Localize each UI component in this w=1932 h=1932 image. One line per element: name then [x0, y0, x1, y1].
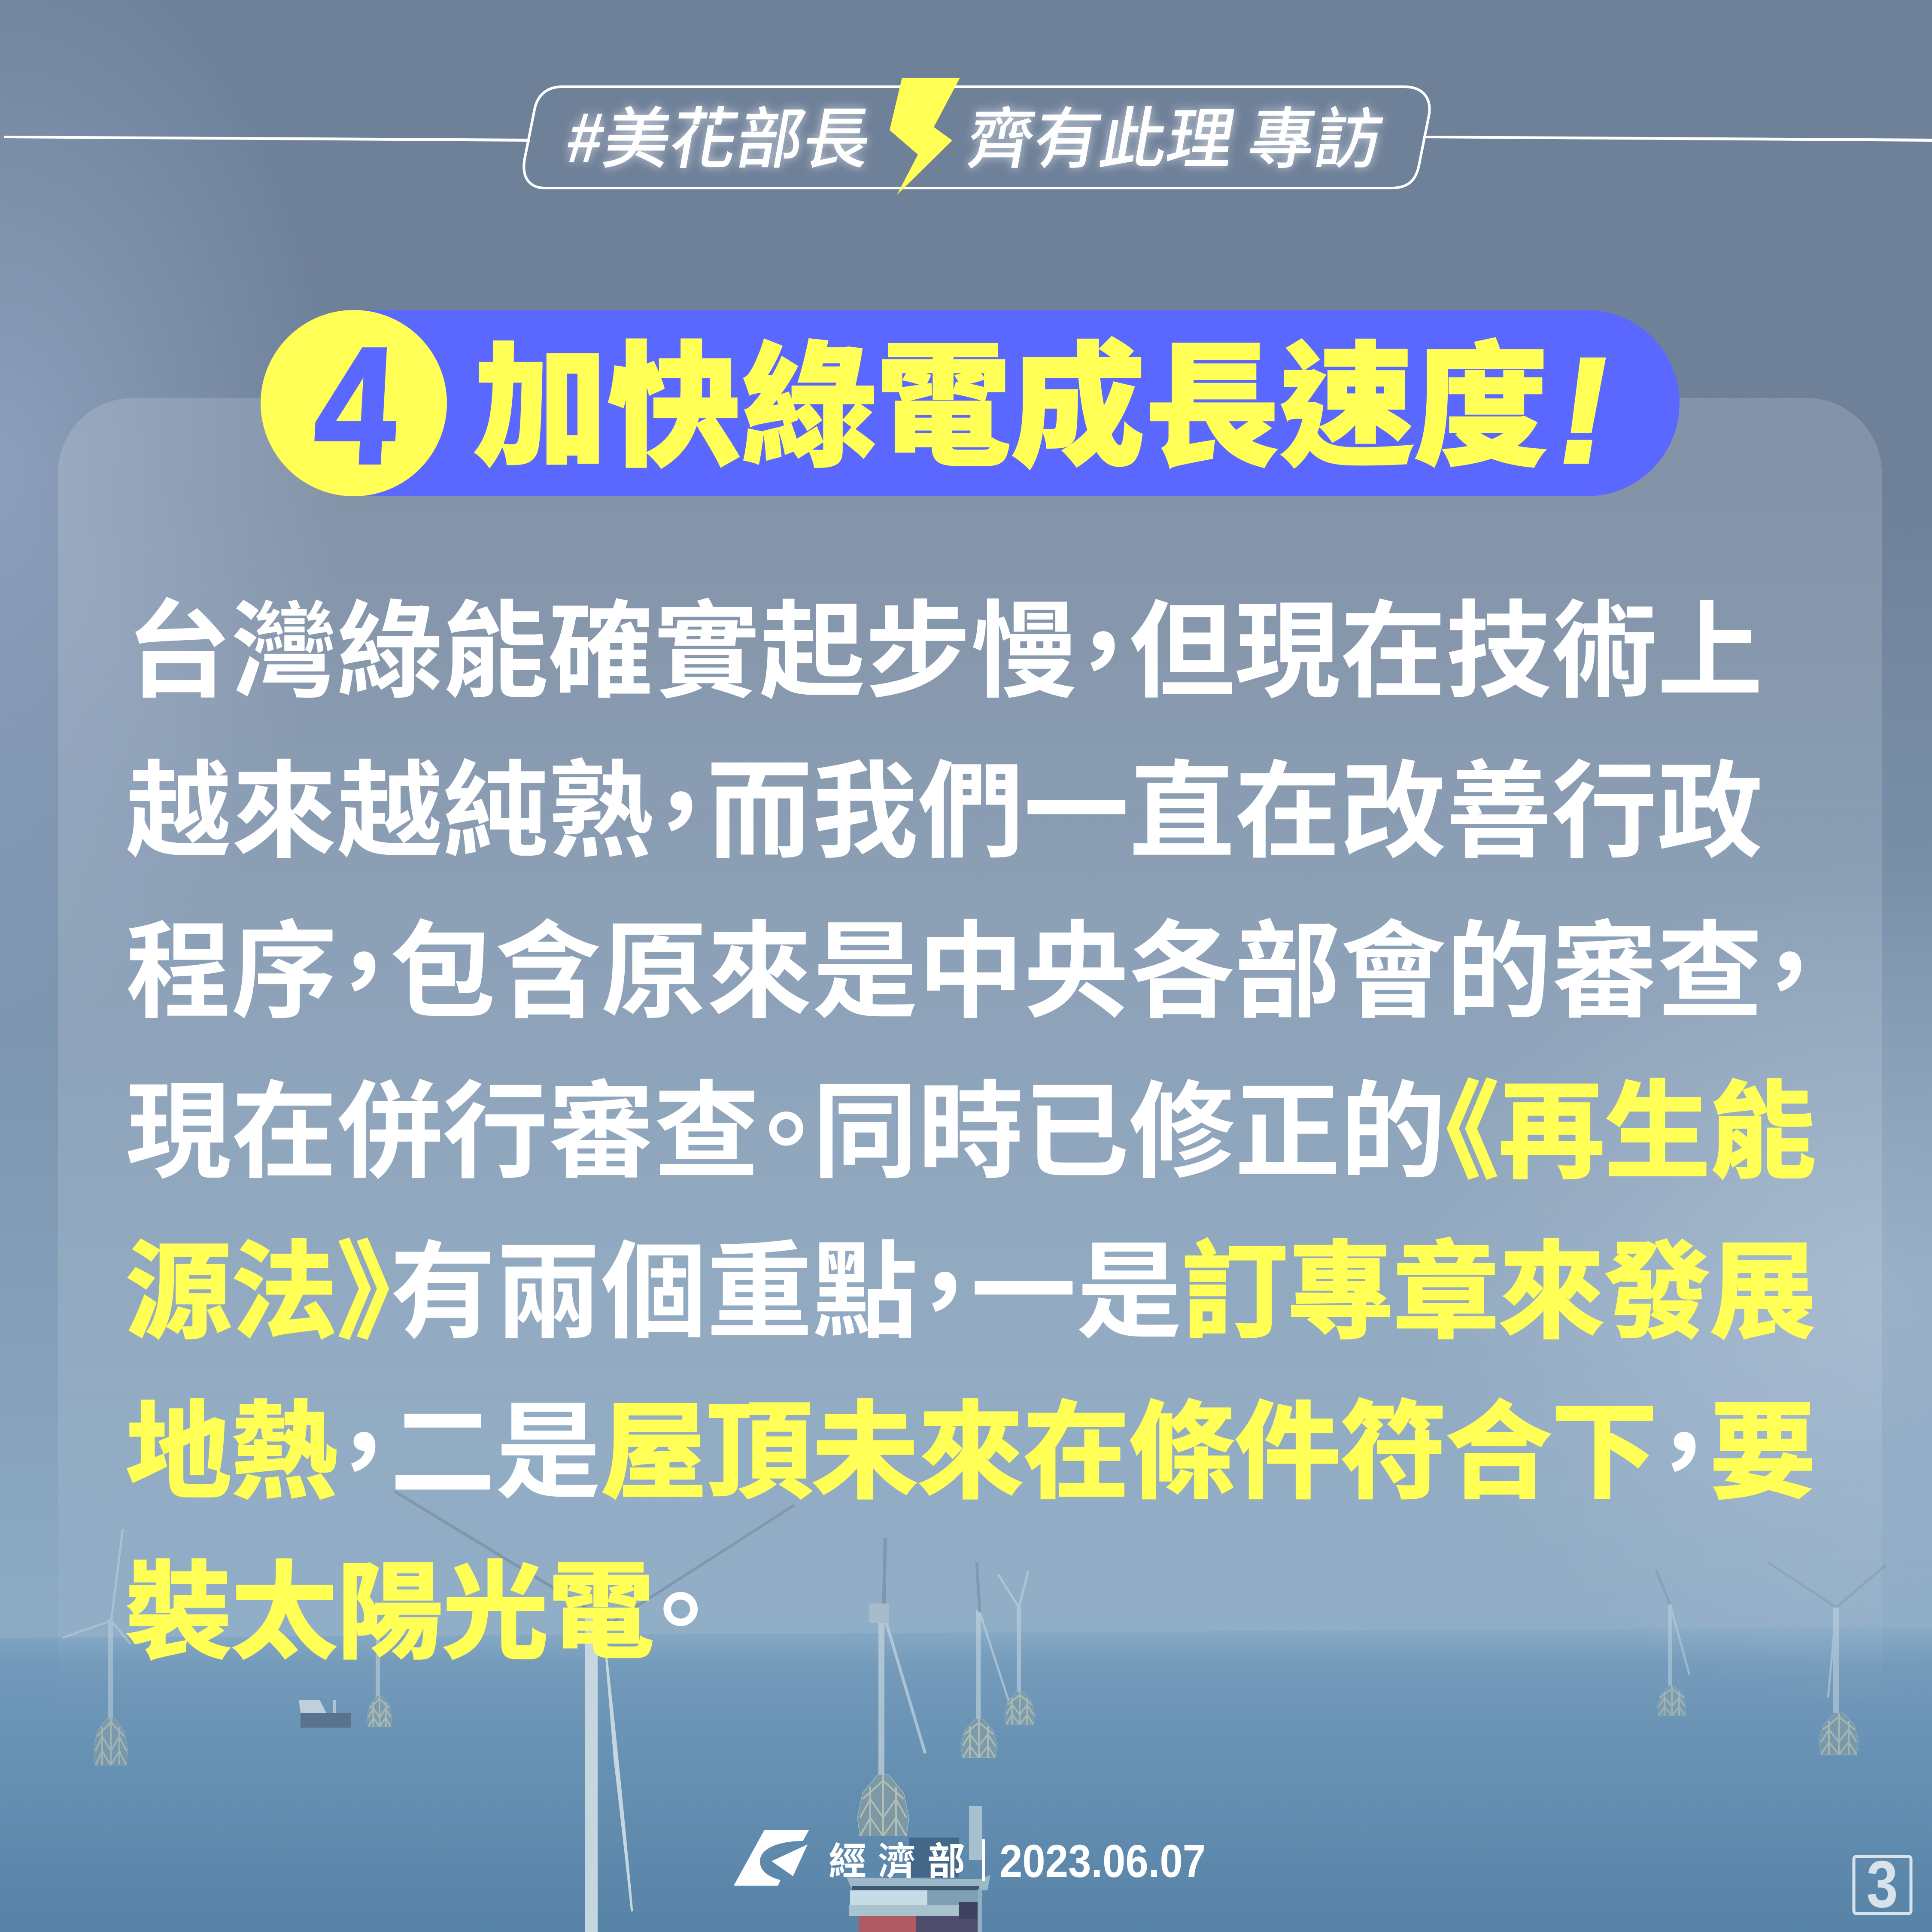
header divider left	[4, 136, 530, 142]
icon: lightning bolt	[890, 78, 960, 195]
title text: 加快綠電成長速度	[473, 299, 1548, 493]
title pill	[261, 310, 1680, 496]
title bar	[261, 299, 1680, 498]
number 4: 4	[311, 313, 402, 498]
page number box	[1854, 1847, 1911, 1921]
turbine E	[961, 1562, 1009, 1758]
turbine B	[367, 1631, 392, 1727]
footer: ministry logo	[734, 1830, 809, 1886]
background glow left	[0, 0, 343, 1030]
number circle	[261, 310, 447, 496]
page number: 3	[1866, 1847, 1898, 1921]
background: sea	[0, 1627, 1932, 1932]
turbine F	[998, 1571, 1035, 1725]
wind farm photo illustration	[62, 1491, 1886, 1932]
title exclamation: !	[1547, 328, 1622, 493]
hashtag: 專訪: 專訪	[1242, 85, 1392, 182]
body text	[126, 566, 1816, 1680]
small vessel	[299, 1700, 351, 1728]
hashtag: 美花部長: #美花部長	[559, 85, 880, 182]
body line 1: 台灣綠能確實起步慢，但現在技術上	[126, 566, 1763, 719]
footer: ministry name: 經濟部	[829, 1831, 977, 1886]
installation ship	[847, 1806, 990, 1932]
hashtag: 齊有此理: 齊有此理	[960, 85, 1244, 182]
background glow right	[1417, 859, 1932, 1717]
main turbine C	[394, 1491, 795, 1932]
footer separator	[982, 1839, 985, 1881]
body line 2: 越來越純熟，而我們一直在改善行政	[126, 726, 1763, 879]
panel: translucent content card	[58, 398, 1882, 1709]
body line 6: 地熱，二是屋頂未來在條件符合下，要	[126, 1367, 1816, 1519]
header divider right	[1423, 136, 1932, 142]
footer date: 2023.06.07	[999, 1835, 1206, 1887]
turbine D	[857, 1538, 925, 1836]
turbine H	[1767, 1562, 1886, 1755]
turbine A	[62, 1529, 131, 1765]
header pill outline	[524, 87, 1430, 188]
turbine G	[1656, 1570, 1689, 1716]
body line 3: 程序，包含原來是中央各部會的審查，	[126, 886, 1816, 1039]
body line 5: 源法》有兩個重點，一是訂專章來發展	[126, 1206, 1816, 1359]
body line 7: 裝太陽光電。	[126, 1527, 707, 1680]
body line 4: 現在併行審查。同時已修正的《再生能	[126, 1046, 1816, 1199]
